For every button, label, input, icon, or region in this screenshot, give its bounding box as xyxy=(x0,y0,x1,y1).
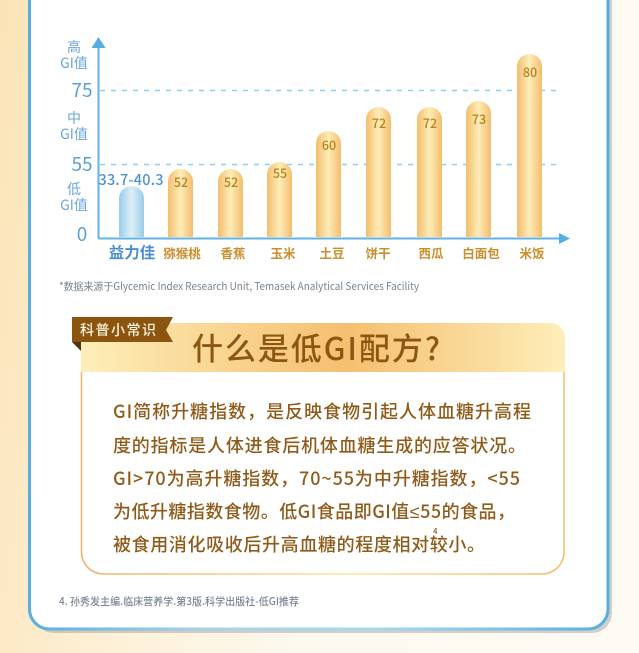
value labels: 52 xyxy=(174,172,188,191)
data source note: *数据来源于Glycemic Index Research Unit, Temasek Analytical Services Facility xyxy=(59,279,420,294)
heading band xyxy=(81,323,565,372)
panel: info box xyxy=(72,317,565,574)
y axis labels xyxy=(60,37,88,215)
y axis numbers xyxy=(71,76,93,247)
bar: 玉米 xyxy=(267,162,292,237)
value labels: 80 xyxy=(523,62,537,81)
y axis labels: 中 xyxy=(67,108,81,128)
category labels: 玉米 xyxy=(270,243,296,262)
tag: 科普小常识: 科普小常识 xyxy=(80,320,156,340)
category labels: 白面包 xyxy=(462,243,500,262)
tag: 科普小常识 xyxy=(72,317,173,342)
body text: 度的指标是人体进食后机体血糖生成的应答状况。 xyxy=(113,432,526,458)
body text xyxy=(113,398,531,557)
body text: 被食用消化吸收后升高血糖的程度相对较小。 xyxy=(113,531,485,557)
category labels: 米饭 xyxy=(519,243,545,262)
threshold line 55 xyxy=(100,164,560,166)
superscript 4: 4 xyxy=(433,526,438,537)
bar: 西瓜 xyxy=(417,107,442,237)
value labels: 33.7-40.3 xyxy=(98,169,164,190)
bar: 猕猴桃 xyxy=(168,169,193,237)
value labels: 52 xyxy=(224,172,238,191)
value labels: 73 xyxy=(472,109,486,128)
category labels: 西瓜 xyxy=(418,243,444,262)
category labels: 猕猴桃 xyxy=(163,243,201,262)
bar chart: GI comparison xyxy=(60,37,570,263)
y axis labels: 低 xyxy=(67,179,81,199)
y axis numbers: 55 xyxy=(71,150,93,177)
category labels xyxy=(109,241,545,263)
value labels: 55 xyxy=(273,163,287,182)
box outline xyxy=(82,372,564,574)
y axis labels: 高 xyxy=(67,37,81,57)
bar: 香蕉 xyxy=(218,169,243,237)
icon: y axis arrow xyxy=(92,37,106,48)
y axis labels: GI值 xyxy=(60,124,88,144)
y axis xyxy=(98,46,100,238)
tag fold xyxy=(72,342,81,351)
value labels: 60 xyxy=(322,135,336,154)
value labels: 72 xyxy=(372,113,386,132)
body text: GI>70为高升糖指数，70~55为中升糖指数，<55 xyxy=(113,465,520,491)
bar: 米饭 xyxy=(517,54,542,237)
category labels: 饼干 xyxy=(365,243,391,262)
bar: 土豆 xyxy=(316,131,341,237)
body text: 为低升糖指数食物。低GI食品即GI值≤55的食品， xyxy=(113,498,515,524)
icon: x axis arrow xyxy=(559,233,570,244)
y axis labels: GI值 xyxy=(60,195,88,215)
heading: 什么是低GI配方? xyxy=(192,324,440,369)
threshold line 75 xyxy=(100,90,560,92)
bar: 益力佳 xyxy=(119,186,144,237)
category labels: 土豆 xyxy=(319,243,345,262)
bar: 白面包 xyxy=(466,101,491,237)
x axis xyxy=(98,238,562,240)
footnote: 4. 孙秀发主编.临床营养学.第3版.科学出版社-低GI推荐 xyxy=(59,594,299,609)
category labels: 香蕉 xyxy=(220,243,246,262)
y axis numbers: 0 xyxy=(77,220,87,247)
bar: 饼干 xyxy=(366,107,391,237)
y axis numbers: 75 xyxy=(71,76,93,103)
value labels: 72 xyxy=(423,113,437,132)
y axis labels: GI值 xyxy=(60,53,88,73)
body text: GI简称升糖指数，是反映食物引起人体血糖升高程 xyxy=(113,398,531,424)
value labels xyxy=(98,62,537,191)
category labels: 益力佳 xyxy=(109,241,156,263)
